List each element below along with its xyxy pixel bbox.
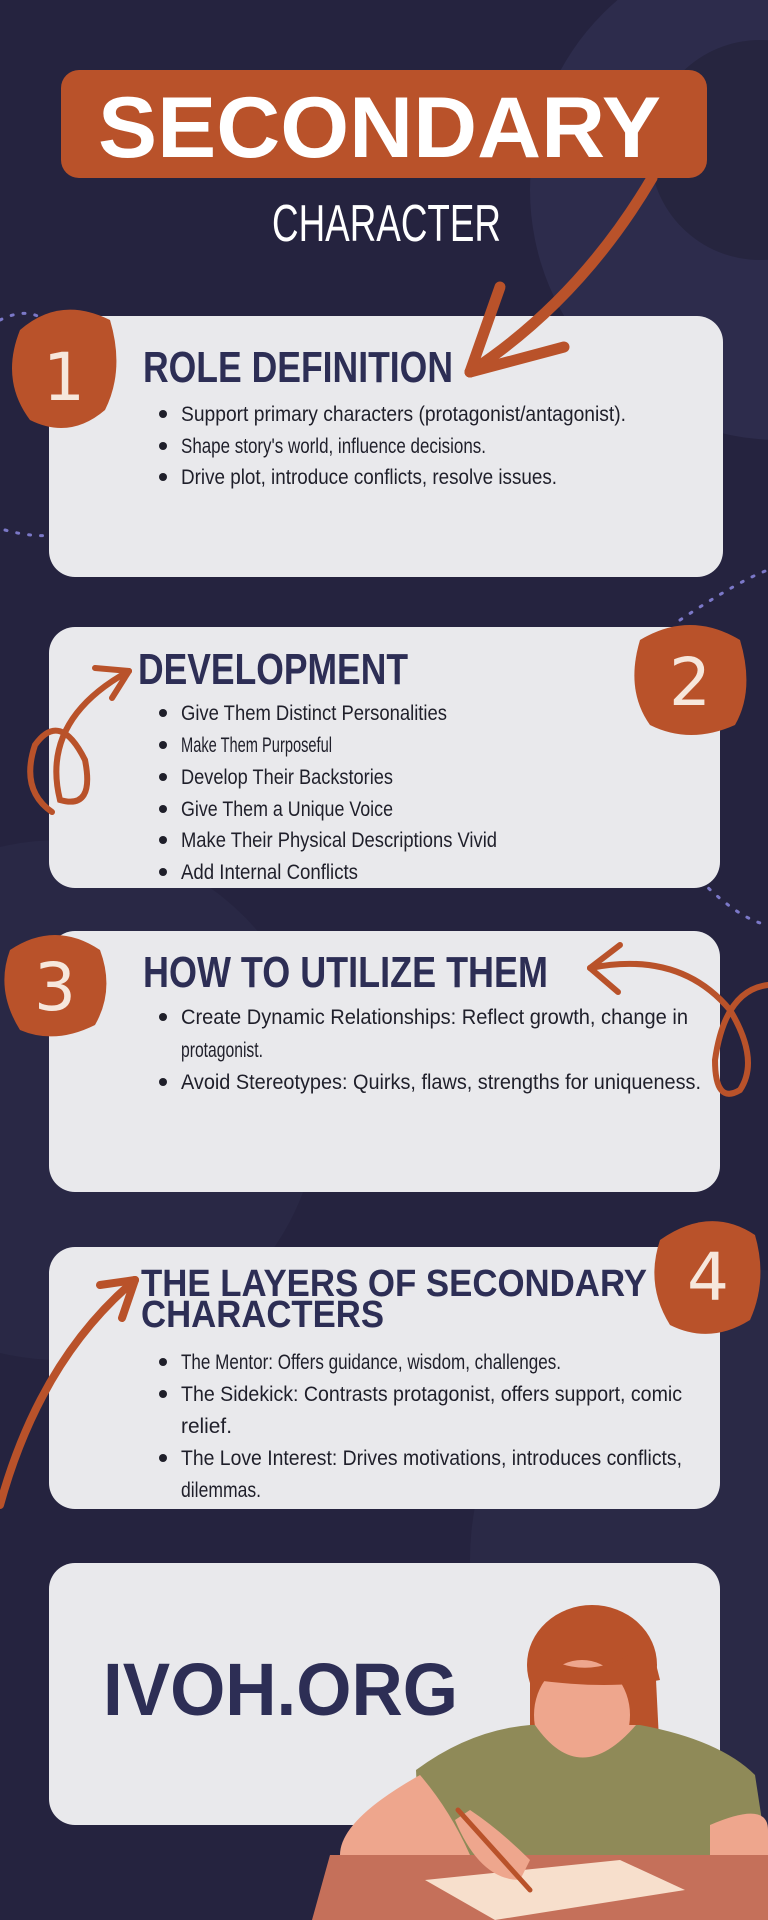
title banner: SECONDARY [98, 80, 661, 176]
arrow: curl into how to utilize [590, 945, 768, 1094]
badge 2 [634, 625, 746, 735]
panel: development: DEVELOPMENT [138, 645, 408, 694]
arrow: curl into development [30, 668, 129, 812]
panel: footer brand [49, 1563, 720, 1825]
panel: development: Make Their Physical Descriptions Vivid [181, 829, 497, 852]
panel: how to utilize [49, 931, 720, 1192]
panel: layers: dilemmas. [181, 1479, 261, 1502]
panel: layers: The Sidekick: Contrasts protagonist, offers support, comic [181, 1383, 682, 1406]
badge 3 [4, 935, 106, 1036]
panel: role definition: Shape story's world, influence decisions. [181, 435, 486, 458]
panel: development: Add Internal Conflicts [181, 861, 358, 884]
panel: role definition: Support primary characters (protagonist/antagonist). [181, 403, 626, 426]
panel: development: Make Them Purposeful [181, 734, 332, 757]
arrow: title to role definition [470, 178, 652, 372]
illustration: girl writing [312, 1605, 768, 1920]
panel: layers [49, 1247, 720, 1509]
panel: how to utilize: Create Dynamic Relationships: Reflect growth, change in [181, 1006, 688, 1029]
badge 4: 4 [687, 1239, 729, 1316]
panel: layers: The Love Interest: Drives motivations, introduces conflicts, [181, 1447, 682, 1470]
panel: how to utilize: HOW TO UTILIZE THEM [143, 948, 548, 997]
badge 1 [12, 310, 116, 428]
panel: layers: THE LAYERS OF SECONDARY [141, 1263, 647, 1305]
panel: footer brand: IVOH.ORG [103, 1648, 458, 1731]
panel: role definition: ROLE DEFINITION [143, 343, 453, 392]
badge 1: 1 [43, 339, 85, 416]
badge 2: 2 [669, 644, 711, 721]
arrow: into layers [0, 1280, 135, 1505]
panel: how to utilize: Avoid Stereotypes: Quirks, flaws, strengths for uniqueness. [181, 1071, 701, 1094]
panel: role definition: Drive plot, introduce conflicts, resolve issues. [181, 466, 557, 489]
panel: development: Give Them Distinct Personalities [181, 702, 447, 725]
panel: development: Develop Their Backstories [181, 766, 393, 789]
badge 4 [654, 1221, 760, 1334]
panel: development [49, 627, 720, 888]
panel: layers: relief. [181, 1415, 232, 1438]
panel: development: Give Them a Unique Voice [181, 798, 393, 821]
panel: role definition [49, 316, 723, 577]
panel: layers: CHARACTERS [141, 1294, 384, 1336]
panel: layers: The Mentor: Offers guidance, wisdom, challenges. [181, 1351, 561, 1374]
subtitle: CHARACTER [272, 195, 501, 253]
panel: how to utilize: protagonist. [181, 1039, 263, 1062]
badge 3: 3 [34, 949, 76, 1026]
